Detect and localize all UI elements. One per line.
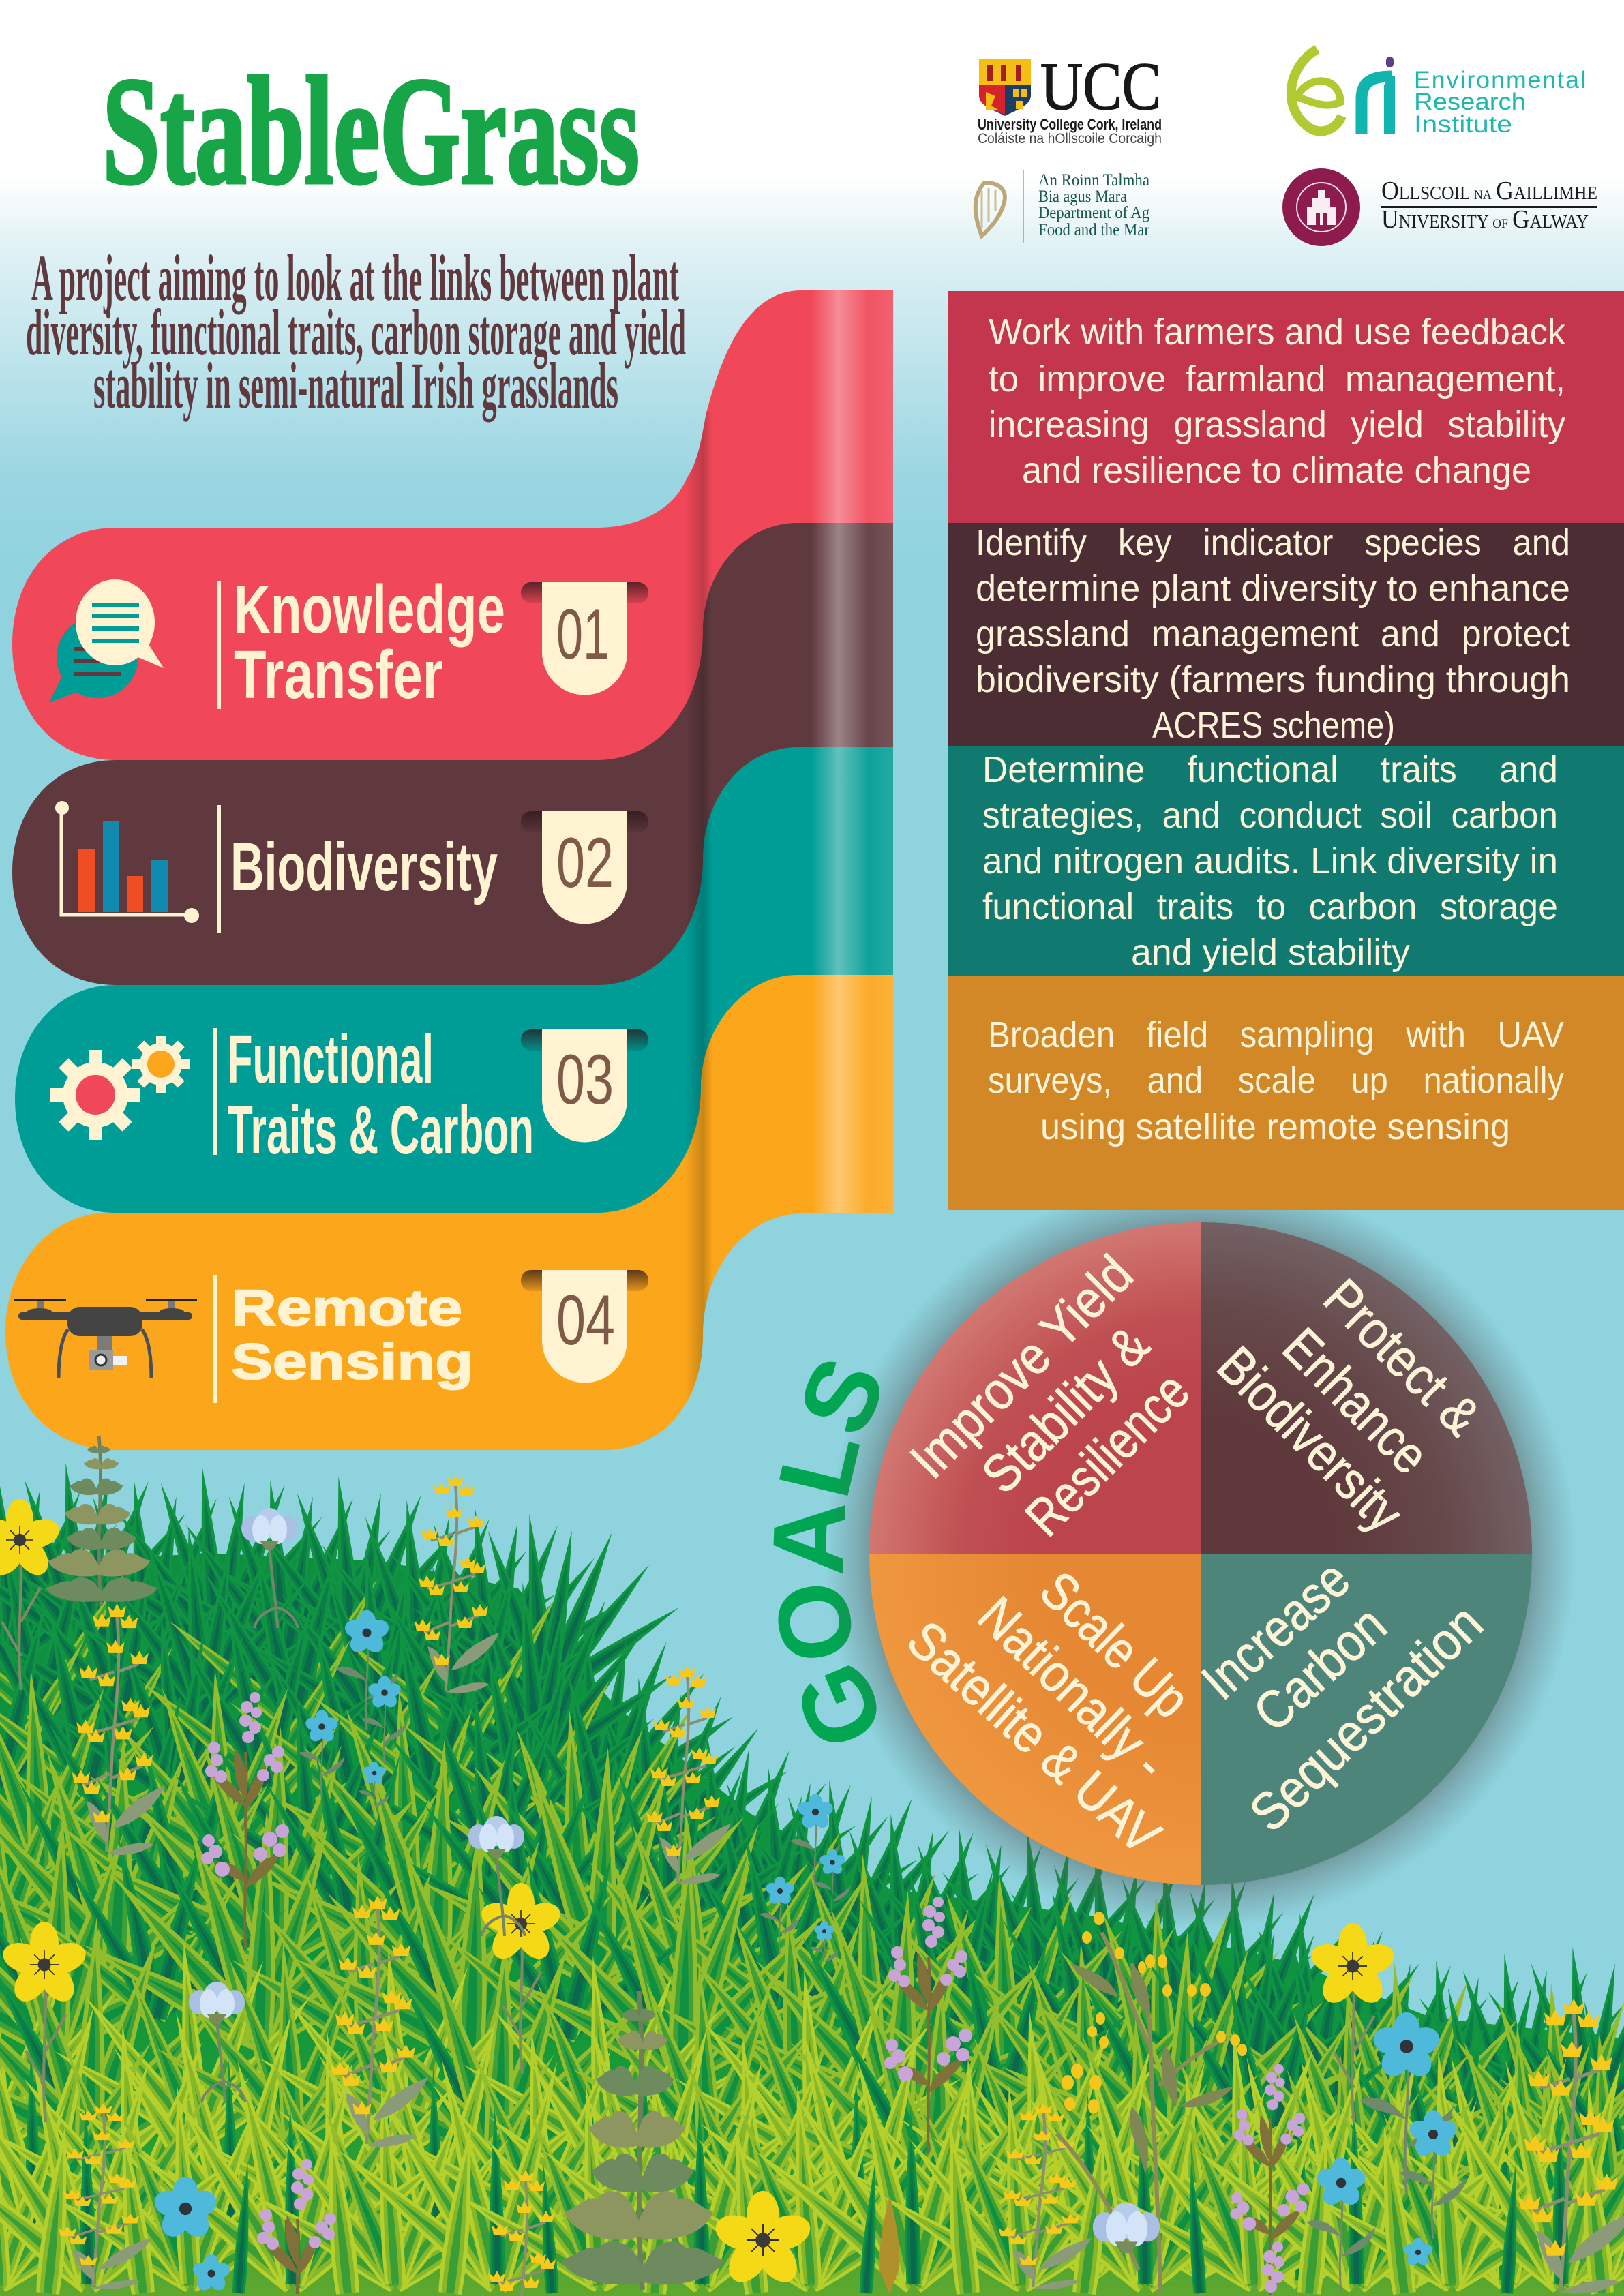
icon: pale flower [189, 1982, 245, 2102]
subtitle [26, 241, 686, 422]
icon: blue flower [1359, 2012, 1454, 2194]
icon: bar chart [55, 801, 199, 923]
logo: Department of Agriculture, Food and the Marine: An Roinn Talmha [1038, 171, 1149, 190]
icon: yellow flower [0, 1499, 63, 1690]
panel: biodiversity description: Identify key indicator species and [976, 522, 1570, 563]
text: A project aiming to look at the links between plant [31, 241, 679, 314]
label group: biodiversity [55, 801, 648, 933]
icon: pale flower [468, 1816, 525, 1936]
label group: biodiversity: 02 [556, 824, 614, 903]
panel: knowledge transfer description [948, 291, 1624, 523]
logo: Department of Agriculture, Food and the Marine: Department of Ag [1038, 204, 1149, 222]
panel: remote sensing description: surveys, and scale up nationally [988, 1060, 1564, 1101]
icon: blue flower [791, 1794, 840, 1890]
icon: blue flower [814, 1849, 851, 1920]
panel: functional traits description: strategies, and conduct soil carbon [982, 795, 1558, 836]
icon: blue flower [1402, 2238, 1434, 2267]
panel: knowledge transfer description: increasing grassland yield stability [989, 404, 1565, 445]
label group: knowledge transfer [49, 571, 648, 713]
logo: Department of Agriculture, Food and the Marine [976, 170, 1150, 243]
panel: biodiversity description: biodiversity (farmers funding through [976, 659, 1570, 700]
logo: University College Cork: UCC [1040, 48, 1161, 124]
logo: Environmental Research Institute: Environmental [1414, 67, 1587, 93]
label group: knowledge transfer: Transfer [234, 637, 443, 713]
icon: blue flower [299, 1710, 345, 1799]
goals heading [773, 1362, 879, 1742]
icon: yellow raceme [59, 2104, 151, 2289]
segment: improve yield [869, 1222, 1201, 1554]
icon: blue flower [361, 1676, 408, 1765]
icon: yellow flower [478, 1883, 564, 2074]
goals pie chart [826, 1179, 1576, 1929]
icon: blue flower [1400, 2110, 1467, 2239]
icon: yellow raceme [489, 2170, 556, 2296]
panel: functional traits description: Determine functional traits and [982, 749, 1558, 790]
logo: University of Galway: UNIVERSITY OF GALWAY [1381, 205, 1589, 234]
panel: knowledge transfer description: Work with farmers and use feedback [989, 312, 1566, 352]
icon: sage plant bottom [561, 1991, 724, 2290]
goals heading: GOALS [773, 1362, 879, 1742]
icon: gears [32, 1024, 201, 1158]
icon: yellow flower [0, 1922, 89, 2122]
panel: functional traits description: and nitrogen audits. Link diversity in [982, 841, 1558, 881]
segment: scale nationally: Scale Up [1029, 1560, 1201, 1729]
logo: University of Galway [1282, 168, 1597, 246]
text: diversity, functional traits, carbon storage and yield [26, 296, 686, 369]
segment: protect biodiversity [1201, 1222, 1532, 1554]
panel: biodiversity description: determine plant diversity to enhance [976, 568, 1570, 609]
icon: yellow raceme [1518, 1999, 1624, 2294]
logo: Environmental Research Institute [1291, 49, 1587, 138]
icon: yellow raceme [331, 1895, 428, 2147]
segment: improve yield: Resilience [1014, 1361, 1201, 1547]
panel: functional traits description: and yield stability [1131, 932, 1410, 973]
icon: blue flower [335, 1610, 398, 1730]
logo: Environmental Research Institute: Institute [1414, 111, 1512, 138]
icon: speech bubbles [49, 579, 164, 703]
segment: carbon sequestration: Increase [1190, 1549, 1361, 1711]
icon: yellow raceme [415, 1475, 499, 1693]
panel: biodiversity description [948, 522, 1624, 746]
icon: yellow flower [711, 2191, 815, 2289]
icon: lilac flowers [257, 2159, 336, 2294]
band 2: biodiversity ribbon [12, 518, 893, 985]
panel: remote sensing description: using satellite remote sensing [1040, 1106, 1510, 1147]
segment: carbon sequestration [1190, 1549, 1532, 1885]
label group: functional traits and carbon: Functional [228, 1021, 434, 1098]
icon: yellow raceme [72, 1603, 165, 1855]
band 1: knowledge transfer ribbon [12, 290, 893, 760]
icon: yellow raceme [999, 2104, 1092, 2289]
panel: biodiversity description: grassland management and protect [976, 614, 1570, 654]
logo: University College Cork: Coláiste na hOllscoile Corcaigh [978, 131, 1162, 147]
icon: pale flower [241, 1508, 298, 1628]
panel: knowledge transfer description: and resilience to climate change [1022, 450, 1531, 491]
icon: blue flower [810, 1921, 839, 1976]
icon: blue flower [151, 2177, 220, 2242]
logo: Environmental Research Institute: Research [1414, 89, 1526, 115]
label group: remote sensing: Remote [231, 1280, 462, 1336]
label group: functional traits and carbon [32, 1021, 648, 1168]
label group: biodiversity: Biodiversity [230, 829, 498, 905]
logo: University of Galway: OLLSCOIL NA GAILLIMHE [1381, 177, 1597, 205]
panel: functional traits description: functional traits to carbon storage [982, 886, 1558, 927]
segment: carbon sequestration: Sequestration [1238, 1592, 1494, 1843]
icon: blue flower [1307, 2158, 1375, 2291]
segment: scale nationally: Nationally - [967, 1585, 1178, 1792]
panel: functional traits description [948, 746, 1624, 976]
panel: knowledge transfer description: to improve farmland management, [989, 359, 1565, 399]
logo: Department of Agriculture, Food and the Marine: Bia agus Mara [1038, 187, 1127, 206]
icon: yellow flower [1308, 1923, 1398, 2124]
icon: lilac flowers [884, 1897, 972, 2153]
icon: yellow raceme [646, 1665, 731, 1884]
icon: yellow ball plant [1057, 1912, 1247, 2294]
panel: remote sensing description: Broaden field sampling with UAV [988, 1014, 1564, 1055]
label group: functional traits and carbon: 03 [556, 1040, 614, 1119]
panel: remote sensing description [948, 976, 1624, 1210]
logo: University College Cork [978, 48, 1162, 147]
icon: pale flower [1093, 2203, 1160, 2253]
label group: functional traits and carbon: Traits & Carbon [228, 1092, 534, 1168]
segment: improve yield: Stability & [970, 1314, 1160, 1505]
icon: lilac flowers [201, 1692, 289, 1948]
subtitle: stability in semi-natural Irish grasslands [93, 349, 618, 422]
label group: knowledge transfer: Knowledge [234, 571, 505, 648]
icon: sage plant top left [46, 1436, 157, 1605]
icon: lilac flowers [1262, 2241, 1284, 2293]
segment: protect biodiversity: Enhance [1272, 1316, 1441, 1485]
icon: drone [14, 1300, 197, 1378]
label group: remote sensing [14, 1270, 648, 1403]
segment: improve yield: Improve Yield [899, 1243, 1144, 1490]
logo: Department of Agriculture, Food and the Marine: Food and the Mar [1038, 221, 1150, 239]
icon: brown seed head [879, 2195, 899, 2295]
band 3: functional traits ribbon [15, 743, 893, 1213]
icon: blue flower [760, 1877, 800, 1954]
segment: protect biodiversity: Biodiversity [1206, 1335, 1415, 1543]
icon: blue flower [191, 2254, 232, 2293]
label group: knowledge transfer: 01 [556, 595, 610, 674]
logo: University College Cork: University College Cork, Ireland [978, 116, 1162, 133]
grass meadow [0, 1462, 1624, 2296]
panel: biodiversity description: ACRES scheme) [1152, 705, 1395, 746]
band 4: remote sensing ribbon [5, 971, 893, 1450]
segment: scale nationally: Satellite & UAV [897, 1609, 1172, 1866]
icon: lilac flowers [1230, 2064, 1310, 2295]
icon: blue flower [359, 1762, 390, 1823]
label group: remote sensing: 04 [556, 1281, 615, 1360]
segment: carbon sequestration: Carbon [1242, 1595, 1398, 1743]
title: StableGrass [102, 46, 640, 216]
label group: remote sensing: Sensing [231, 1333, 473, 1390]
segment: protect biodiversity: Protect & [1312, 1267, 1492, 1447]
